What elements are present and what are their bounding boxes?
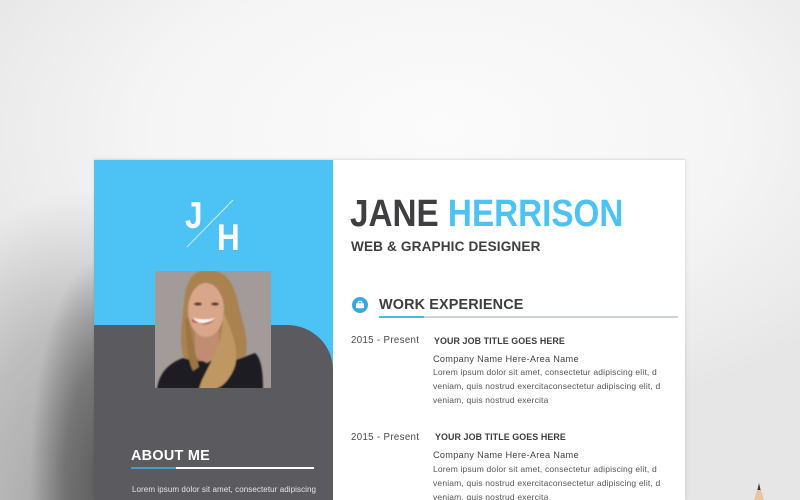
job entry 2: Company Name Here-Area Name [433,450,579,460]
resume paper [94,160,685,500]
job entry 1: YOUR JOB TITLE GOES HERE [434,336,565,346]
portrait photo [155,271,271,388]
job entry 2: 2015 - Present [351,432,419,443]
icon: briefcase [352,297,368,313]
monogram logo [185,196,240,255]
job entry 1: veniam, quis nostrud exercita [433,395,548,405]
subtitle: WEB & GRAPHIC DESIGNER [351,239,541,254]
icon: pencil tip [754,483,764,500]
job entry 1 [351,335,660,405]
name title: JANE HERRISON [350,193,623,235]
heading: work experience: WORK EXPERIENCE [379,297,524,313]
job entry 2: YOUR JOB TITLE GOES HERE [435,432,566,442]
about me text: Lorem ipsum dolor sit amet, consectetur adipiscing [132,485,316,494]
job entry 2: Lorem ipsum dolor sit amet, consectetur adipiscing elit, d [433,464,657,474]
job entry 1: Lorem ipsum dolor sit amet, consectetur adipiscing elit, d [433,367,657,377]
job entry 2 [351,432,660,500]
dark sidebar panel [94,325,333,500]
sidebar [94,160,333,500]
heading: about me: ABOUT ME [131,448,210,464]
monogram logo: J [185,196,202,237]
job entry 2: veniam, quis nostrud exercitaconsectetur adipiscing elit, d [433,478,660,488]
job entry 1: 2015 - Present [351,335,419,346]
job entry 1: veniam, quis nostrud exercitaconsectetur adipiscing elit, d [433,381,660,391]
paper shadow [0,160,94,500]
job entry 1: Company Name Here-Area Name [433,354,579,364]
